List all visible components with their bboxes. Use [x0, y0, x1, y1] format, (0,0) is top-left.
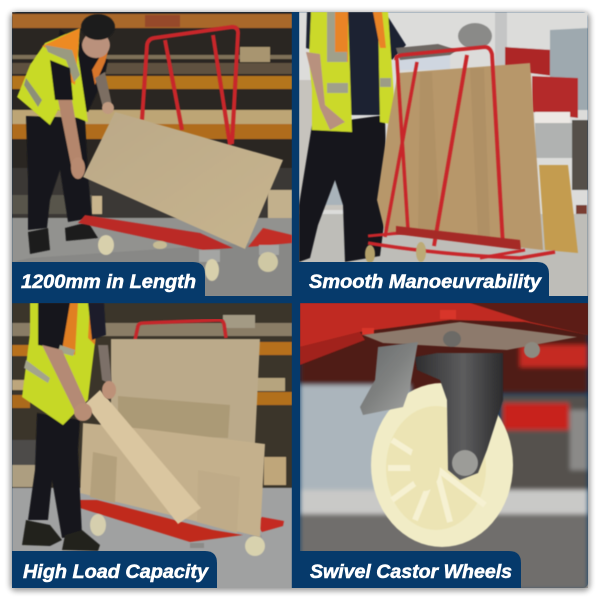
caption: length: [12, 262, 205, 296]
wheel: [371, 383, 513, 547]
panel: length photo: [12, 12, 292, 298]
wheels: [365, 242, 426, 263]
caption: castor wheels: Swivel Castor Wheels: [310, 562, 512, 583]
caption: manoeuvrability: Smooth Manoeuvrability: [309, 272, 542, 293]
castor fork: [415, 353, 503, 480]
trolley base rail: [396, 226, 521, 250]
castor mount plate: [363, 322, 577, 358]
person: worker: [17, 14, 115, 254]
caption: load capacity: [12, 551, 217, 588]
person: worker torso: [299, 12, 457, 262]
panel: load capacity photo: [12, 303, 292, 590]
caption: length: 1200mm in Length: [21, 272, 196, 293]
caption: manoeuvrability: [299, 262, 549, 296]
trolley frame: [142, 27, 238, 145]
plywood board: [83, 112, 283, 249]
castor brake lever: [360, 342, 418, 415]
caption: load capacity: High Load Capacity: [23, 562, 209, 583]
person: worker: [22, 303, 116, 551]
plywood boards: [80, 339, 265, 537]
panel: castor wheel photo: [300, 303, 588, 590]
trolley underside: [300, 303, 588, 365]
trolley base and wheels: [78, 215, 292, 281]
caption: castor wheels: [300, 551, 521, 588]
axle bolt: [452, 450, 478, 476]
trolley handle: [135, 320, 226, 340]
panel: manoeuvrability photo: [299, 12, 588, 298]
trolley base and wheels: [79, 500, 284, 556]
trolley frame: [368, 47, 555, 258]
plywood boards: [377, 63, 578, 253]
